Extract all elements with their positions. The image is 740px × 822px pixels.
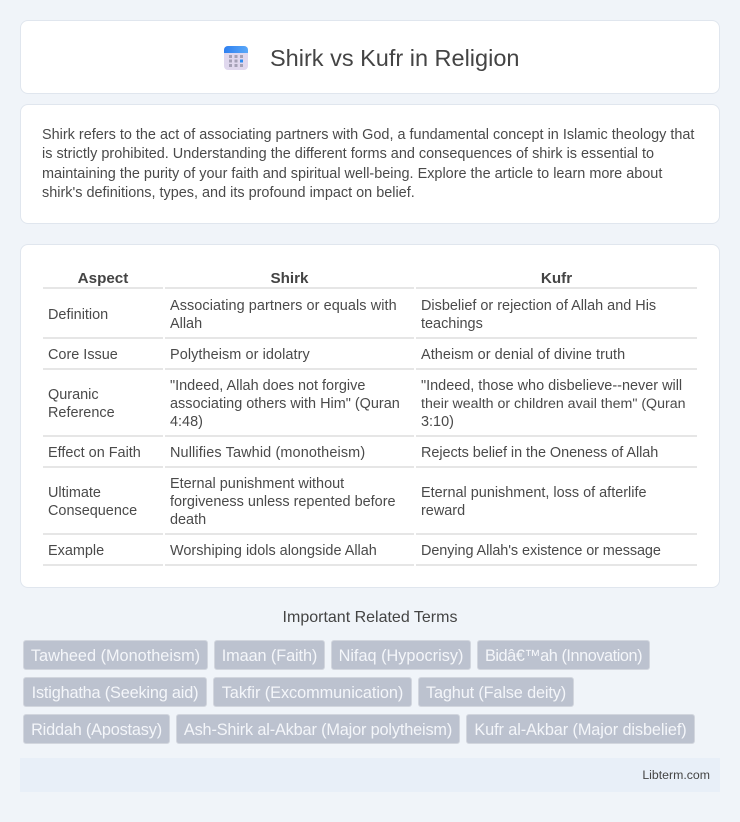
comparison table: associating others with Him" (Quran	[170, 396, 400, 412]
related term tags: Riddah (Apostasy)	[31, 721, 162, 739]
comparison table: Core Issue	[48, 347, 118, 363]
related term tags: Nifaq (Hypocrisy)	[339, 647, 463, 665]
comparison table: Reference	[48, 405, 115, 421]
comparison table: "Indeed, Allah does not forgive	[170, 378, 365, 394]
comparison table: Kufr	[541, 270, 572, 287]
related term tags: Imaan (Faith)	[222, 647, 317, 665]
comparison table: Atheism or denial of divine truth	[421, 347, 625, 363]
comparison table: Worshiping idols alongside Allah	[170, 543, 377, 559]
footer credit: Libterm.com	[642, 768, 710, 782]
table panel	[20, 244, 720, 588]
comparison table: Effect on Faith	[48, 445, 141, 461]
intro text: maintaining the purity of your faith and spiritual well-being. Explore the article to learn more about	[42, 166, 662, 182]
intro text: shirk's definitions, types, and its profound impact on belief.	[42, 185, 415, 201]
comparison table: Eternal punishment, loss of afterlife	[421, 485, 647, 501]
comparison table: Definition	[48, 307, 108, 323]
related term tags: Taghut (False deity)	[426, 684, 566, 702]
comparison table: Quranic	[48, 387, 99, 403]
related term tags: Bidâ€™ah (Innovation)	[485, 647, 642, 665]
related terms heading: Important Related Terms	[283, 609, 457, 626]
title: Shirk vs Kufr in Religion	[270, 45, 519, 71]
comparison table	[43, 270, 697, 566]
comparison table: death	[170, 512, 206, 528]
related term tags: Istighatha (Seeking aid)	[32, 684, 198, 702]
comparison table: Aspect	[78, 270, 128, 287]
intro panel	[20, 104, 720, 224]
related term tags: Takfir (Excommunication)	[222, 684, 403, 702]
comparison table: Nullifies Tawhid (monotheism)	[170, 445, 365, 461]
comparison table: 4:48)	[170, 414, 203, 430]
comparison table: Example	[48, 543, 104, 559]
comparison table: "Indeed, those who disbelieve--never will	[421, 378, 682, 394]
comparison table: Denying Allah's existence or message	[421, 543, 661, 559]
comparison table: 3:10)	[421, 414, 454, 430]
related term tags: Ash-Shirk al-Akbar (Major polytheism)	[184, 721, 452, 739]
comparison table: Eternal punishment without	[170, 476, 344, 492]
header panel	[20, 20, 720, 94]
comparison table: their wealth or children avail them" (Quran	[421, 396, 685, 412]
comparison table: Allah	[170, 316, 202, 332]
intro text: is strictly prohibited. Understanding the different forms and consequences of shirk is essential to	[42, 146, 654, 162]
comparison table: Ultimate	[48, 485, 101, 501]
related term tags	[23, 640, 695, 744]
related term tags: Tawheed (Monotheism)	[31, 647, 200, 665]
comparison table: Disbelief or rejection of Allah and His	[421, 298, 656, 314]
footer	[20, 758, 720, 792]
comparison table: Consequence	[48, 503, 137, 519]
related term tags: Kufr al-Akbar (Major disbelief)	[474, 721, 687, 739]
comparison table: teachings	[421, 316, 483, 332]
comparison table: Polytheism or idolatry	[170, 347, 310, 363]
comparison table: Rejects belief in the Oneness of Allah	[421, 445, 658, 461]
comparison table: forgiveness unless repented before	[170, 494, 396, 510]
intro text	[42, 127, 694, 201]
comparison table: reward	[421, 503, 465, 519]
comparison table: Associating partners or equals with	[170, 298, 397, 314]
comparison table: Shirk	[270, 270, 308, 287]
icon: calendar	[224, 46, 248, 70]
intro text: Shirk refers to the act of associating partners with God, a fundamental concept in Islamic theology that	[42, 127, 694, 143]
